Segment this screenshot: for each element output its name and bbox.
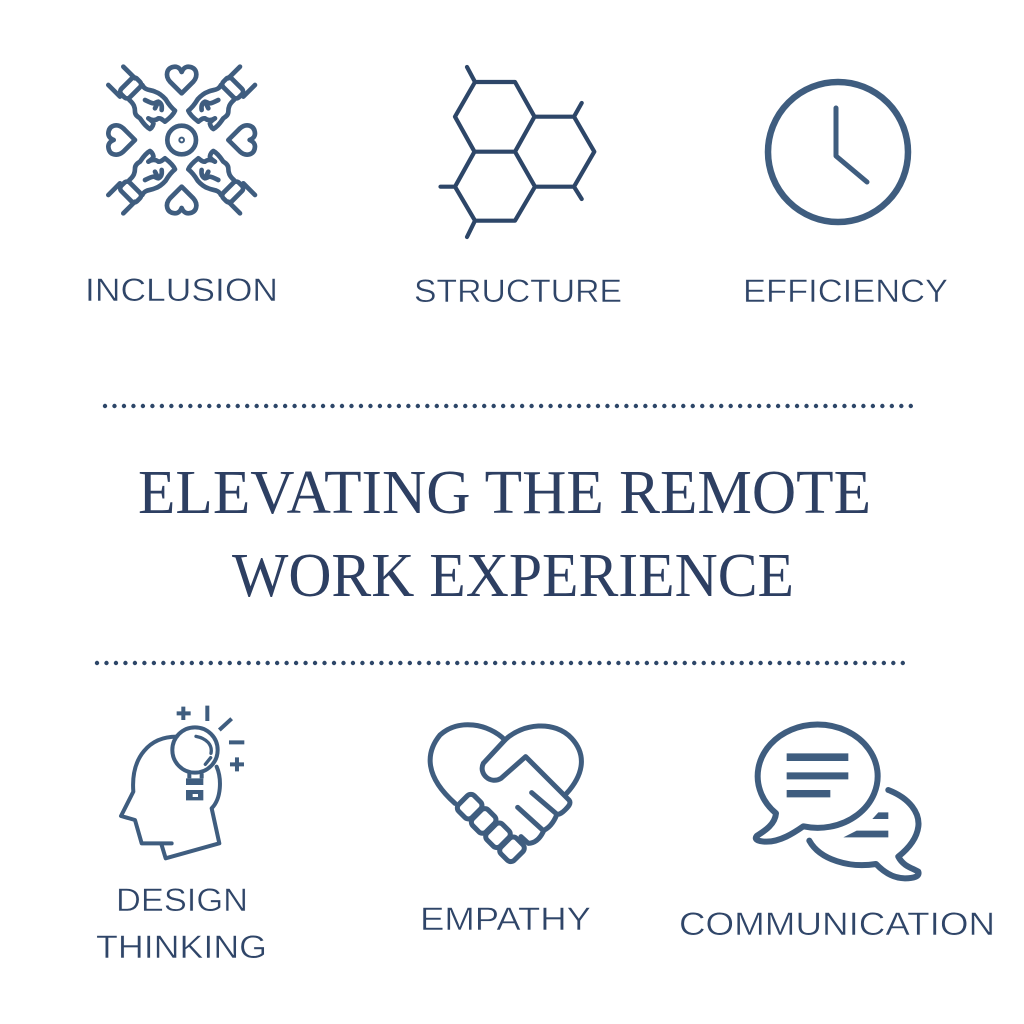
label: design thinking: THINKING — [96, 929, 267, 965]
title: WORK EXPERIENCE — [232, 542, 794, 610]
label: structure: STRUCTURE — [414, 273, 622, 309]
icon: structure hexagons — [440, 67, 594, 237]
label: inclusion: INCLUSION — [85, 272, 278, 308]
icon: efficiency clock — [768, 82, 908, 222]
icon: inclusion — [108, 67, 255, 213]
label: efficiency: EFFICIENCY — [743, 273, 948, 309]
icon: design thinking — [121, 706, 244, 858]
title — [138, 459, 871, 610]
icon: communication chat bubbles — [756, 724, 919, 878]
icon: empathy handshake heart — [430, 725, 581, 864]
label: design thinking — [96, 882, 267, 965]
label: design thinking: DESIGN — [116, 882, 248, 918]
label: empathy: EMPATHY — [420, 901, 591, 937]
title: ELEVATING THE REMOTE — [138, 459, 871, 527]
label: communication: COMMUNICATION — [679, 906, 995, 942]
